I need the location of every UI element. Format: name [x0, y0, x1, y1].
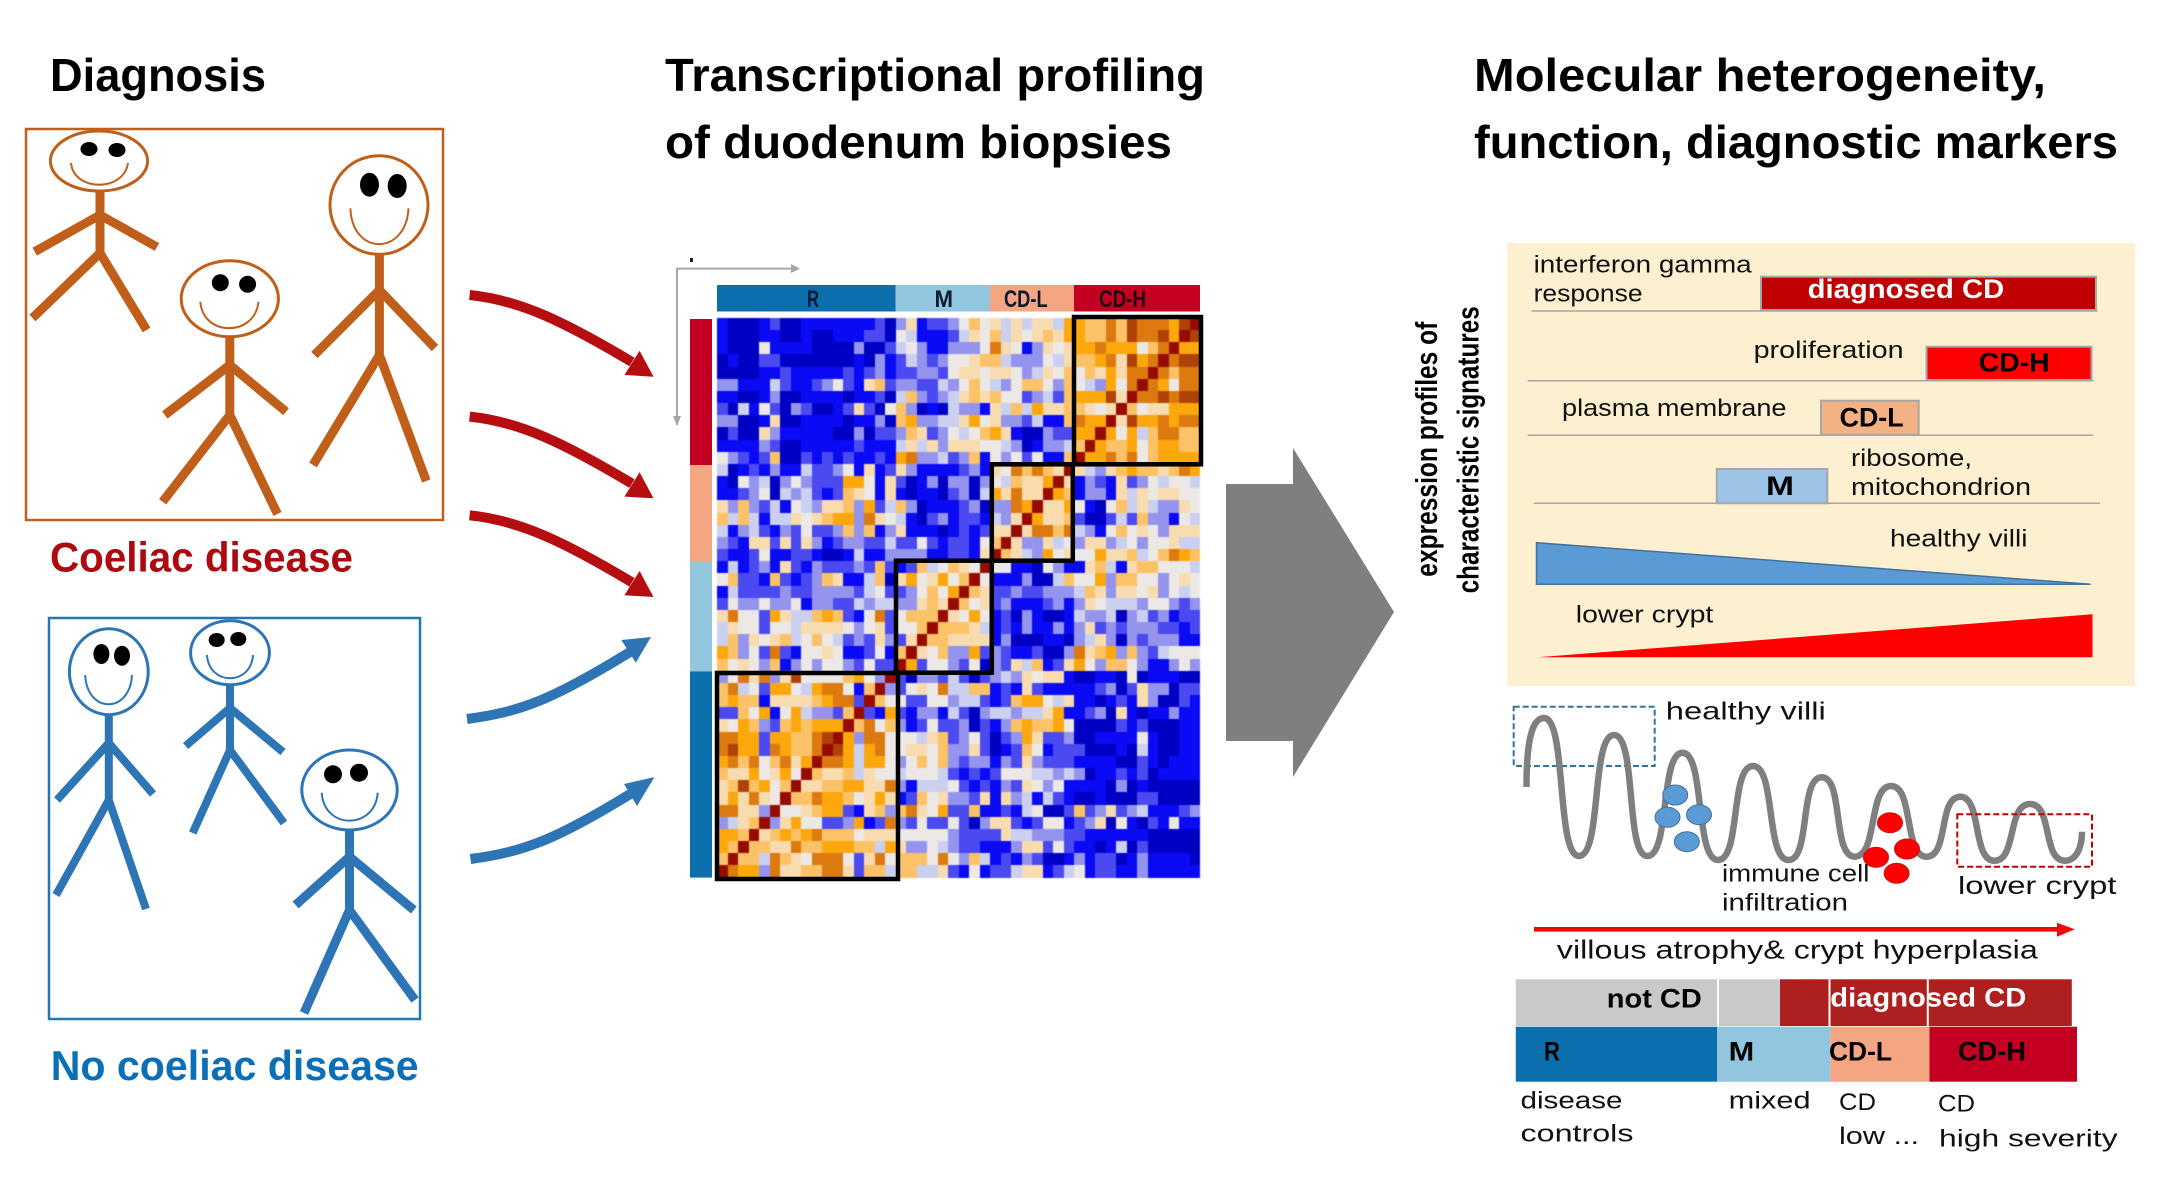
arrow: villous atrophy direction — [1534, 923, 2075, 937]
axis arrows of heatmap — [673, 258, 800, 426]
signature: plasma membrane: plasma membrane — [1562, 395, 1786, 422]
signature: plasma membrane: CD-L — [1840, 403, 1904, 433]
figure: blue person left — [56, 629, 153, 909]
dashed box: lower crypt — [1957, 814, 2092, 867]
signature: proliferation: CD-H — [1979, 348, 2050, 378]
signature: interferon gamma response — [1534, 252, 2096, 310]
figure: orange person left — [32, 131, 157, 330]
heading: Molecular heterogeneity, function, diagnostic markers: function, diagnostic markers — [1474, 116, 2118, 168]
subtype caption: CD low — [1839, 1089, 1919, 1150]
figure: blue person middle — [186, 621, 284, 833]
heatmap: column cluster bar: CD-L — [1004, 286, 1048, 313]
bar: diagnosis status: not CD — [1607, 984, 1702, 1014]
heatmap: column cluster bar: M — [934, 286, 953, 313]
bar: diagnosis status: diagnosed CD — [1830, 983, 2026, 1013]
signature: lower crypt gradient: lower crypt — [1576, 602, 1714, 629]
heatmap: correlation matrix — [716, 317, 1201, 879]
arrow: blue 2 — [470, 777, 654, 859]
panel: no coeliac disease controls — [49, 618, 420, 1019]
arrow: red 2 — [470, 417, 654, 498]
signature: proliferation — [1754, 337, 2092, 380]
heatmap: column cluster bar: CD-H — [1099, 286, 1146, 313]
y-axis label: expression profiles of characteristic signatures — [1409, 306, 1486, 593]
label: Coeliac disease: Coeliac disease — [50, 534, 353, 581]
bar: molecular subtypes — [1516, 1027, 2077, 1082]
subtype caption: CD high severity: high severity — [1939, 1126, 2118, 1153]
big gray arrow — [1226, 448, 1394, 777]
subtype caption: disease controls: controls — [1520, 1121, 1634, 1148]
dashed box: healthy villi — [1514, 707, 1655, 766]
subtype caption: CD low: CD — [1839, 1089, 1876, 1116]
label: villous atrophy & crypt hyperplasia: villous atrophy& crypt hyperplasia — [1557, 934, 2038, 964]
subtype caption: CD high severity: CD — [1938, 1091, 1975, 1118]
signature: ribosome, mitochondrion: ribosome, — [1851, 445, 1972, 472]
arrow: red 3 — [470, 515, 654, 597]
bar: molecular subtypes: M — [1729, 1037, 1754, 1067]
subtype caption: disease controls: disease — [1520, 1087, 1622, 1114]
signature: healthy villi gradient — [1536, 526, 2090, 584]
bar: molecular subtypes: R — [1544, 1037, 1560, 1067]
heatmap: column cluster bar: R — [807, 286, 819, 313]
figure: blue person right — [296, 750, 415, 1013]
signature: ribosome, mitochondrion: M — [1766, 471, 1794, 501]
immune cells: blue — [1655, 785, 1712, 852]
bar: molecular subtypes: CD-H — [1958, 1037, 2026, 1067]
heading: Transcriptional profiling of duodenum biopsies: of duodenum biopsies — [665, 116, 1172, 168]
heatmap: column cluster bar — [717, 285, 1200, 313]
label: immune cell infiltration: infiltration — [1722, 890, 1848, 917]
bar: molecular subtypes: CD-L — [1829, 1037, 1892, 1067]
arrow: red 1 — [470, 295, 654, 377]
heading: Molecular heterogeneity, function, diagnostic markers: Molecular heterogeneity, — [1474, 49, 2046, 101]
signature: plasma membrane — [1562, 395, 1919, 435]
signature: interferon gamma response: interferon gamma — [1534, 252, 1752, 279]
heading: Molecular heterogeneity, function, diagnostic markers — [1474, 49, 2118, 168]
y-axis label: expression profiles of characteristic signatures: characteristic signatures — [1451, 306, 1486, 593]
figure: orange person right — [313, 156, 435, 481]
villi wave line — [1526, 718, 2082, 861]
panel: coeliac disease patients — [26, 129, 443, 520]
signature: interferon gamma response: diagnosed CD — [1808, 274, 2004, 304]
heading: Transcriptional profiling of duodenum biopsies — [665, 49, 1205, 168]
signature: interferon gamma response: response — [1534, 281, 1643, 308]
subtype caption: CD low: low ... — [1839, 1123, 1919, 1150]
label: No coeliac disease: No coeliac disease — [51, 1042, 419, 1089]
heatmap: row cluster bar — [690, 319, 712, 878]
label: healthy villi: healthy villi — [1666, 697, 1826, 725]
signature: proliferation: proliferation — [1754, 337, 1904, 364]
heading: Diagnosis: Diagnosis — [50, 49, 266, 101]
signature: healthy villi gradient: healthy villi — [1890, 526, 2028, 553]
subtype caption: disease controls — [1520, 1087, 1634, 1148]
y-axis label: expression profiles of characteristic signatures: expression profiles of — [1409, 321, 1444, 577]
signature: ribosome, mitochondrion: mitochondrion — [1851, 474, 2031, 501]
figure: orange person middle — [163, 261, 286, 514]
diagram: villi to crypt — [1514, 697, 2117, 917]
heading: Transcriptional profiling of duodenum biopsies: Transcriptional profiling — [665, 49, 1205, 101]
panel: characteristic signatures — [1507, 243, 2135, 686]
bar: diagnosis status — [1516, 979, 2072, 1026]
label: immune cell infiltration: immune cell — [1722, 861, 1869, 888]
subtype caption: CD high severity — [1938, 1091, 2118, 1153]
label: immune cell infiltration — [1722, 861, 1869, 917]
signature: ribosome, mitochondrion — [1717, 445, 2031, 503]
subtype caption: mixed: mixed — [1729, 1087, 1811, 1114]
arrow: blue 1 — [467, 637, 651, 719]
immune cells: red — [1864, 813, 1920, 883]
signature: lower crypt gradient — [1538, 602, 2092, 657]
label: lower crypt: lower crypt — [1958, 872, 2117, 900]
